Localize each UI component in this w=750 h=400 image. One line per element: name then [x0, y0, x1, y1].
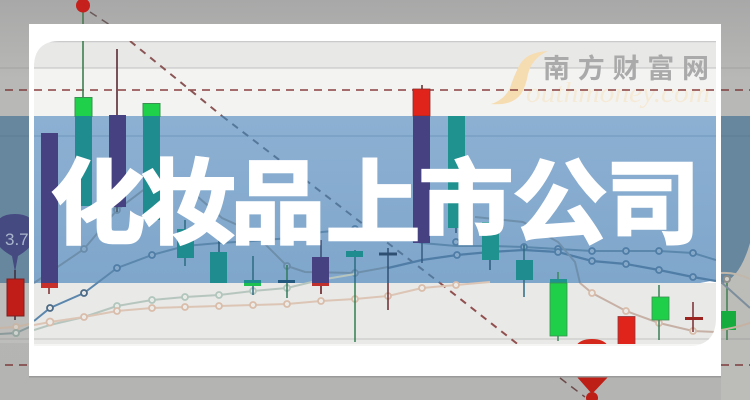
dashed level line	[34, 89, 716, 91]
candle 9 purple	[312, 240, 329, 294]
left outer candle	[7, 270, 24, 320]
candle 3 purple	[109, 49, 126, 212]
candle 4 green teal	[143, 104, 160, 220]
blue title band	[34, 116, 716, 283]
candle 14 teal	[482, 222, 499, 270]
candle 6 teal	[210, 240, 227, 283]
candle 10 long wick	[346, 250, 363, 342]
right outer moving average lines	[721, 273, 750, 330]
panel background	[34, 41, 716, 68]
line: peach average	[34, 217, 716, 334]
moving average lines	[34, 185, 716, 334]
icon: red balloon marker bottom	[577, 377, 608, 400]
candle 2 green teal	[75, 41, 92, 206]
watermark: url: outhmoney.com	[526, 77, 710, 109]
candle 8 cross	[278, 265, 295, 298]
left outer moving average lines	[0, 323, 34, 336]
right outer candle	[721, 283, 736, 340]
candle 7 small	[244, 256, 261, 295]
bottom panel haze	[34, 344, 716, 346]
icon: red marker top	[76, 0, 90, 24]
candle 16 green	[550, 272, 567, 341]
candle 11 cross	[379, 248, 397, 310]
title: 化妆品上市公司	[51, 152, 700, 256]
candle 12 red purple	[413, 85, 430, 263]
candle 13 teal	[448, 116, 465, 233]
icon: purple balloon marker with value: 3.7	[5, 230, 29, 249]
candle 18 green	[652, 285, 669, 340]
candlesticks	[41, 41, 703, 346]
frame bottom shadow	[29, 376, 721, 378]
icon: purple balloon marker with value	[0, 214, 36, 272]
dashed trend line	[130, 41, 520, 346]
line: blue thick average	[34, 226, 716, 321]
candle 17 red	[618, 316, 635, 346]
candle 19 cross	[685, 302, 703, 332]
watermark: logo swoosh	[491, 51, 548, 104]
candle 1 purple	[41, 133, 58, 294]
line: pale green average	[34, 274, 355, 330]
watermark: brand name: 南方财富网	[543, 53, 709, 84]
icon: red balloon marker inside panel	[578, 339, 606, 344]
candle 15 teal	[516, 245, 533, 297]
line: gray-blue average	[34, 185, 388, 283]
candle 5 teal	[177, 220, 194, 266]
inner chart panel	[34, 41, 716, 346]
